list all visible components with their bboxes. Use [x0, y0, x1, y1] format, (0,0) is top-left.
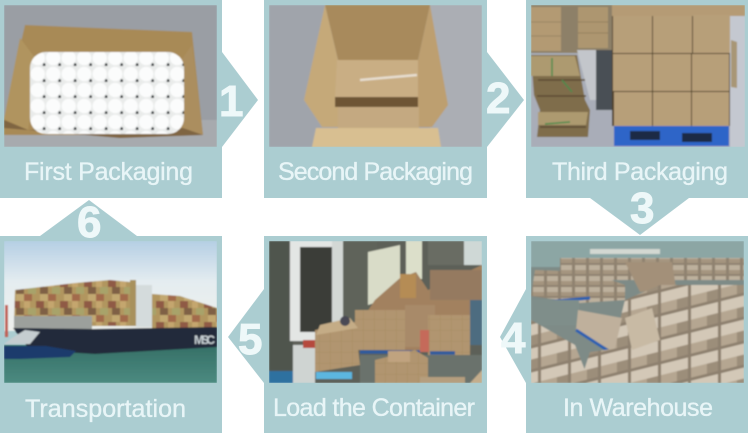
panel 1 background	[0, 0, 258, 198]
photo: white bottles in carton	[4, 5, 217, 147]
panel 6 background	[0, 200, 222, 433]
photo: open carton with inner boxes	[269, 5, 482, 147]
photo: warehouse floor full of cartons	[531, 241, 744, 383]
number 1: 1	[219, 77, 243, 126]
panel 2 background	[264, 0, 524, 198]
photo: container ship at sea: MSC	[194, 333, 215, 347]
panel: in warehouse	[500, 236, 748, 433]
number 3: 3	[630, 184, 654, 233]
photo: container ship at sea	[4, 241, 217, 383]
photo: loading cartons at warehouse door	[269, 241, 482, 383]
panel: load the container	[228, 236, 487, 433]
caption: Second Packaging: Second Packaging	[278, 158, 473, 186]
photo: palletised cartons	[531, 5, 745, 147]
caption: Third Packaging: Third Packaging	[552, 158, 728, 186]
panel 3 background	[526, 0, 748, 235]
caption: Transportation: Transportation	[25, 395, 186, 423]
panel 4 background	[500, 236, 748, 433]
panel: third packaging	[526, 0, 748, 235]
panel: second packaging	[264, 0, 524, 198]
number 2: 2	[486, 74, 510, 123]
caption: First Packaging: First Packaging	[24, 158, 193, 186]
caption: In Warehouse: In Warehouse	[563, 394, 713, 422]
panel 5 background	[228, 236, 487, 433]
panel: transportation	[0, 198, 222, 433]
number 4: 4	[501, 314, 526, 363]
number 6: 6	[77, 198, 101, 247]
number 5: 5	[238, 315, 262, 364]
panel: first packaging	[0, 0, 258, 198]
caption: Load the Container: Load the Container	[273, 394, 475, 422]
